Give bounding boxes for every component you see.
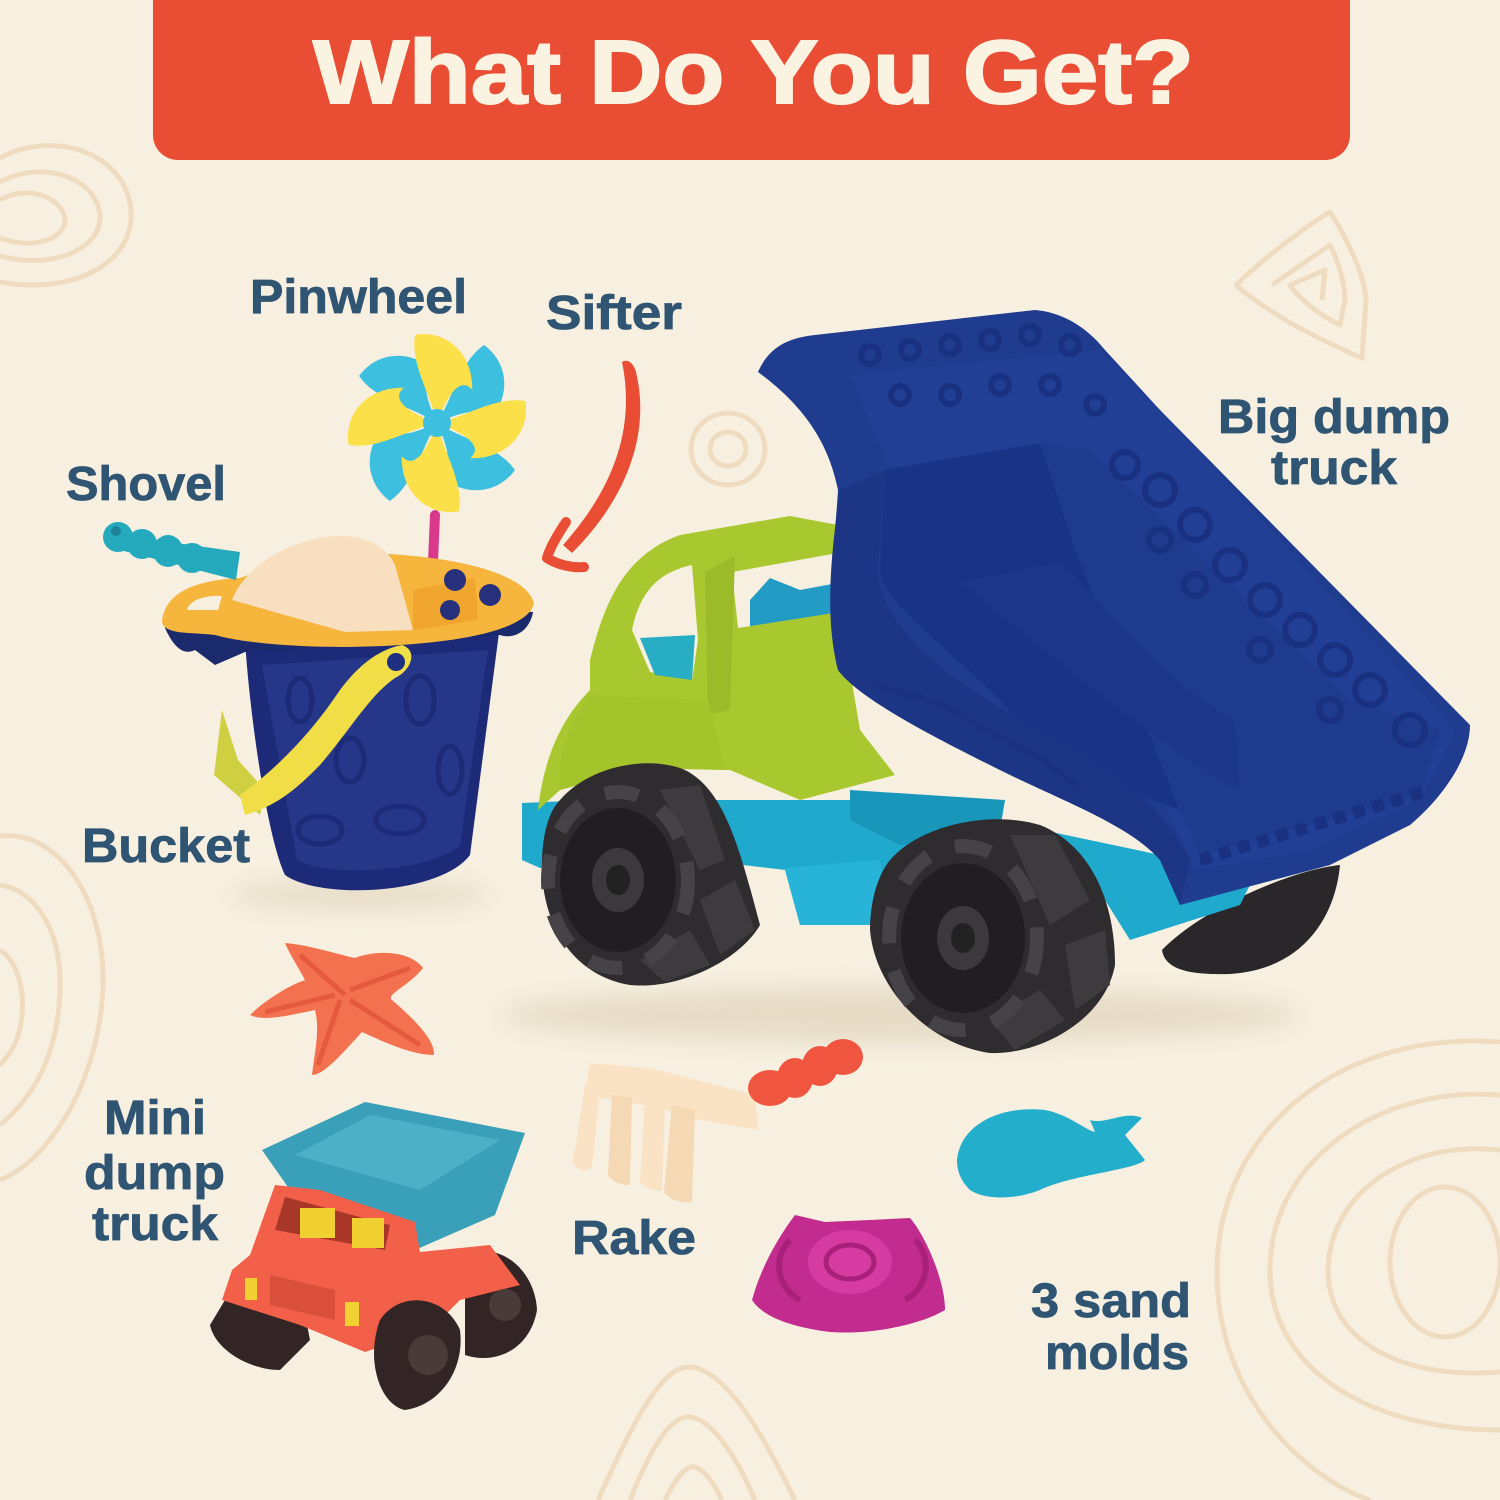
label: mini dump truck: dump (84, 1147, 225, 1200)
bed (758, 310, 1470, 905)
label: big dump truck: Big dump (1218, 391, 1450, 444)
label: sand molds (1031, 1275, 1191, 1380)
label: mini dump truck: Mini (104, 1092, 206, 1145)
icon: starfish mold (250, 943, 434, 1075)
far rear wheel (1162, 865, 1340, 974)
icon: bucket with sifter, shovel and handle (103, 522, 534, 909)
label: bucket: Bucket (82, 820, 250, 873)
title: What Do You Get? (313, 23, 1194, 123)
icon: rake (573, 1039, 863, 1203)
label: pinwheel: Pinwheel (250, 271, 467, 324)
header banner (153, 0, 1350, 160)
label: big dump truck (1218, 391, 1450, 495)
chassis (522, 800, 1255, 940)
label: rake: Rake (572, 1212, 696, 1265)
front wheel (542, 763, 760, 986)
label: sand molds: 3 sand (1031, 1275, 1191, 1328)
arrow: sifter pointer (547, 361, 640, 567)
label: mini dump truck (84, 1092, 225, 1251)
icon: pinwheel (344, 330, 530, 585)
cab (732, 525, 838, 630)
label: shovel: Shovel (66, 458, 226, 511)
label: sifter: Sifter (546, 287, 682, 340)
icon: crab mold (752, 1215, 945, 1333)
icon: whale mold (957, 1109, 1145, 1198)
label: mini dump truck: truck (92, 1198, 218, 1251)
label: sand molds: molds (1045, 1327, 1189, 1380)
icon: big dump truck (500, 310, 1470, 1053)
icon: mini dump truck (210, 1102, 537, 1410)
rear wheel (870, 819, 1115, 1053)
label: big dump truck: truck (1271, 442, 1397, 495)
